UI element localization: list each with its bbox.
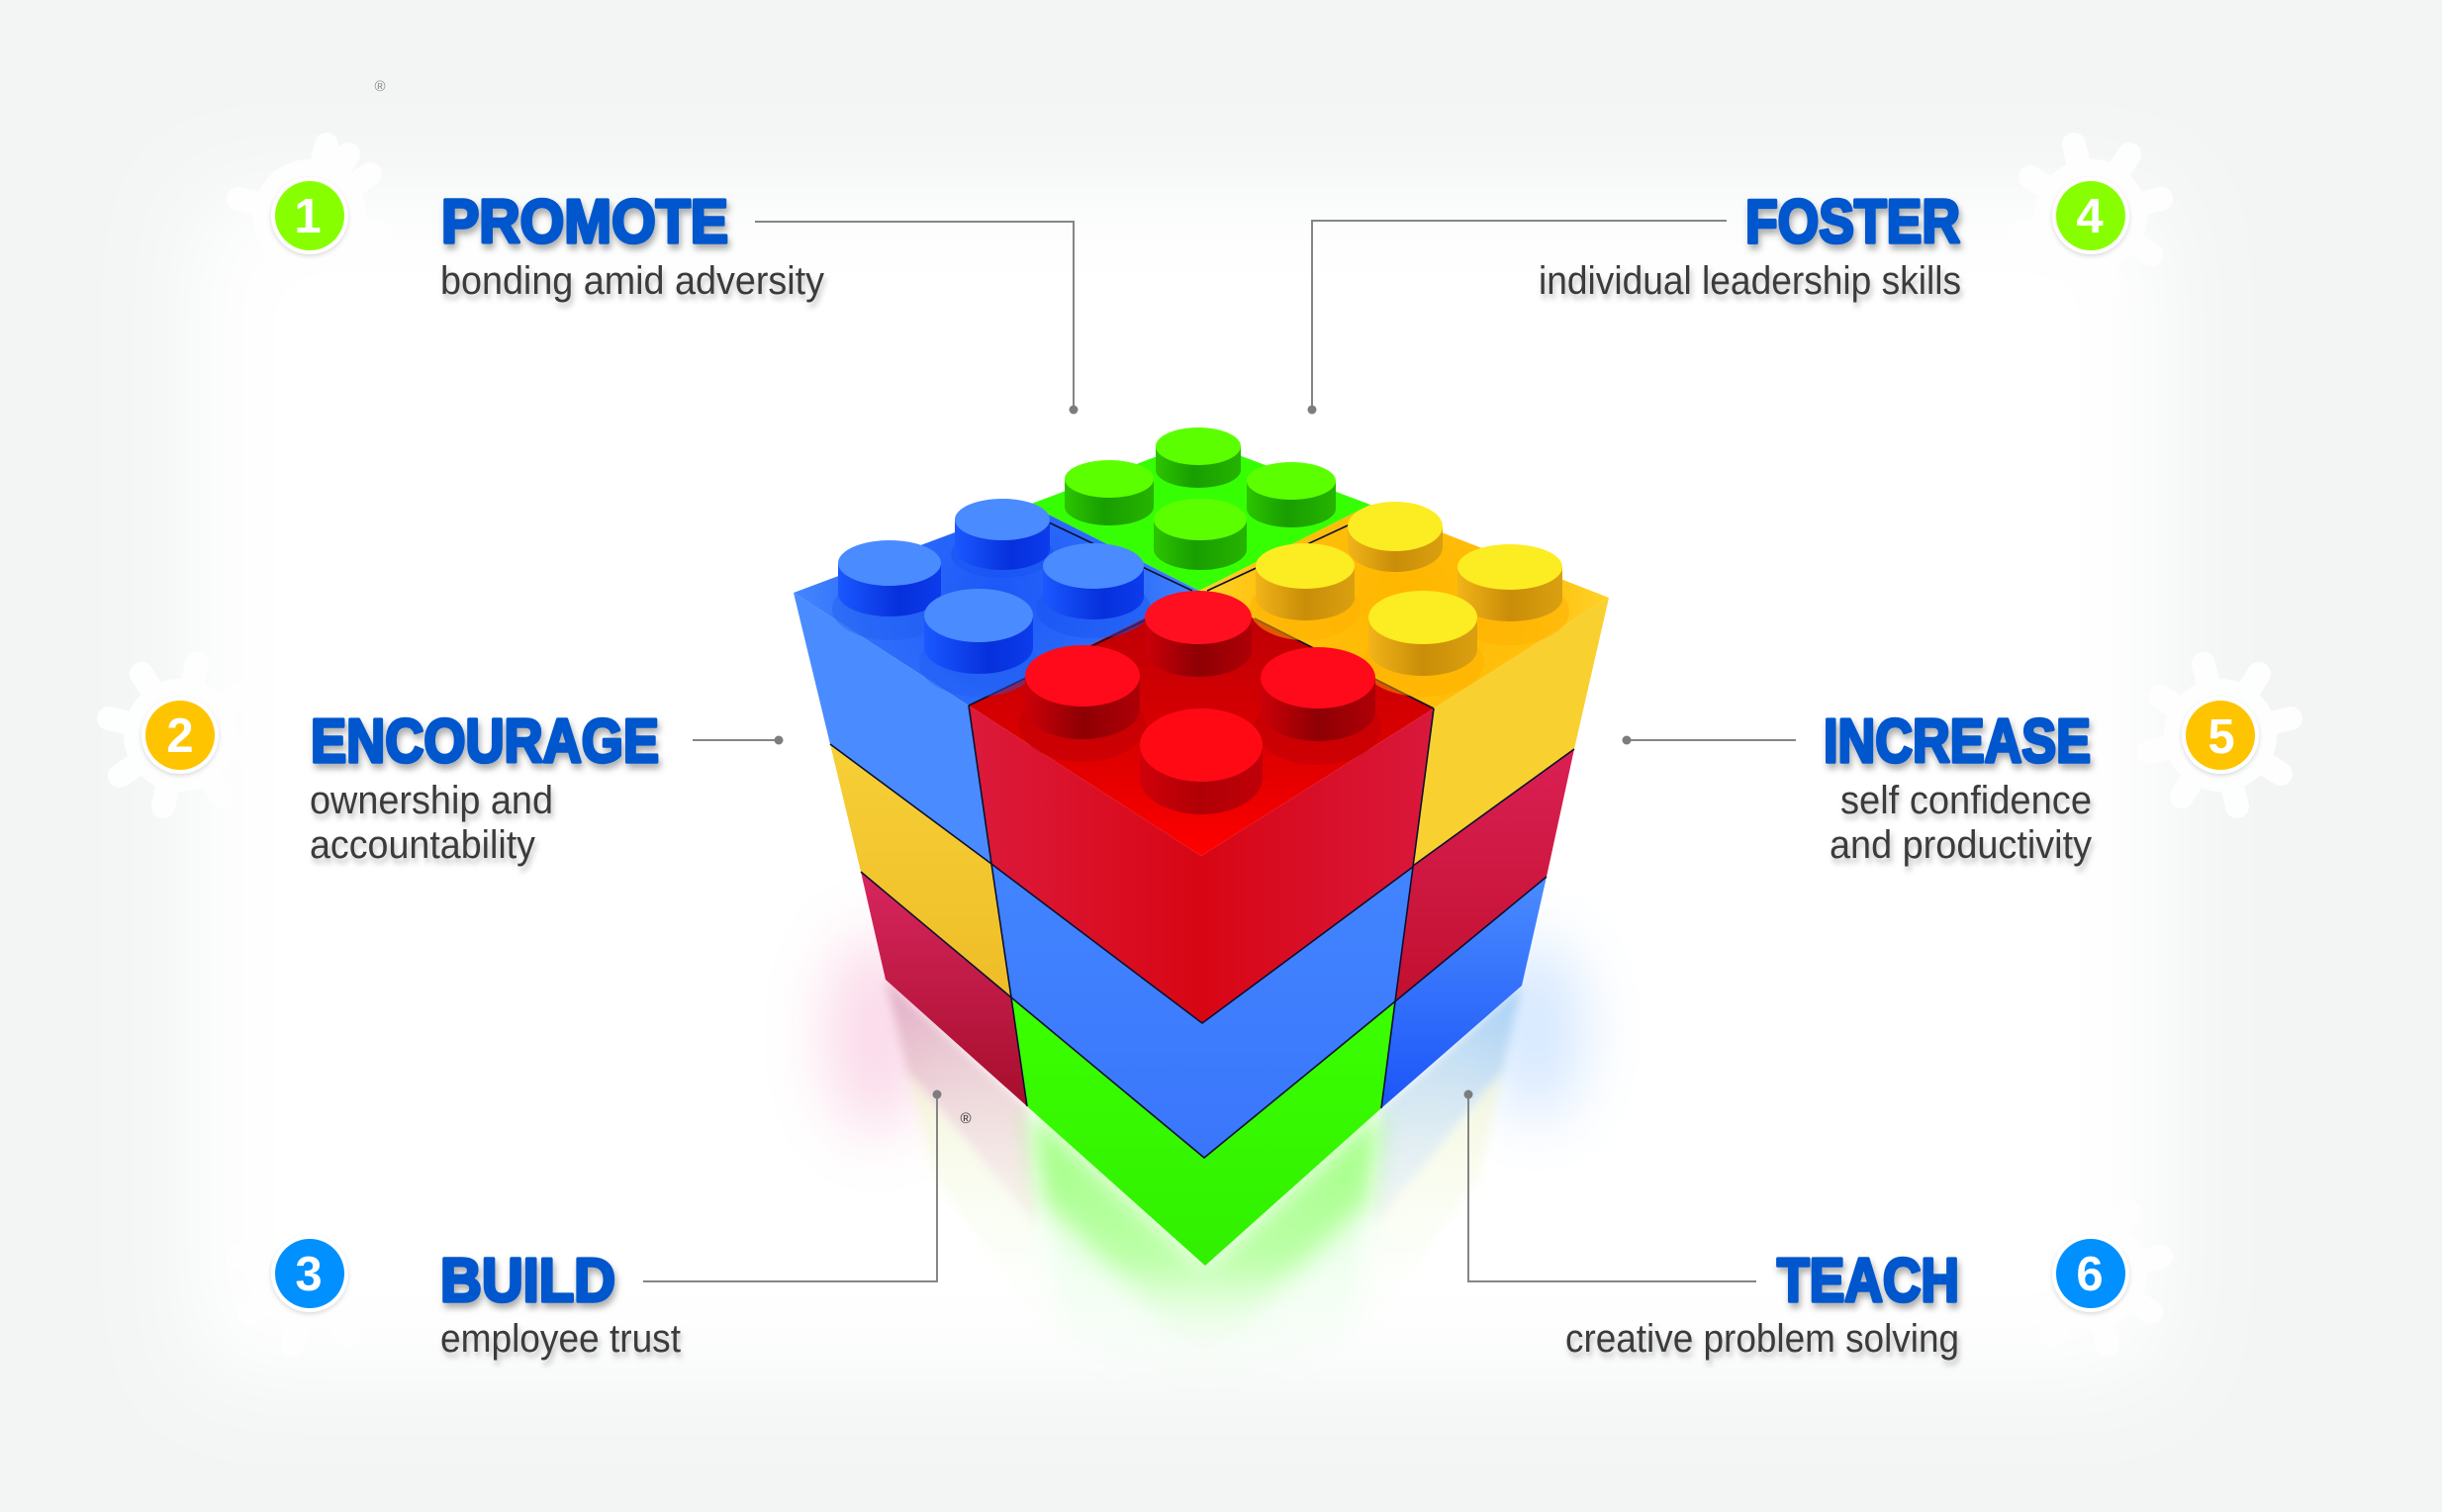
- leader line: promote: [755, 222, 1079, 414]
- top face: green: [1029, 440, 1370, 591]
- front: red chevron: [969, 706, 1434, 1023]
- yellow studs: [1250, 502, 1569, 697]
- badge 2: [141, 697, 219, 774]
- top face: blue: [794, 505, 1199, 706]
- red studs: [1019, 591, 1381, 814]
- badge 2: 2: [166, 709, 194, 763]
- badge 4: 4: [2076, 190, 2104, 243]
- leader line: foster: [1308, 221, 1727, 414]
- registered mark top: ®: [374, 78, 386, 95]
- text block: encourage: ENCOURAGE: [311, 708, 659, 776]
- text block: build: [440, 1247, 681, 1361]
- badge 5: [2182, 697, 2259, 774]
- left column: blue side: [794, 593, 991, 864]
- left column: crimson side: [861, 872, 1027, 1106]
- gear: badge 2: [109, 664, 251, 806]
- text block: promote: bonding amid adversity: [440, 259, 824, 303]
- badge 6: [2052, 1235, 2129, 1312]
- text block: increase: self confidence: [1840, 779, 2092, 822]
- leader line: increase: [1623, 736, 1796, 744]
- gear: badge 6: [2019, 1202, 2161, 1345]
- top face: red: [969, 591, 1434, 856]
- text block: promote: PROMOTE: [441, 188, 728, 256]
- text block: encourage: ownership and: [310, 779, 553, 822]
- text block: foster: [1539, 188, 1961, 303]
- text block: build: BUILD: [440, 1247, 615, 1315]
- text block: increase: [1824, 708, 2092, 867]
- left column: yellow side: [830, 744, 1011, 997]
- leader line: encourage: [693, 736, 784, 744]
- text block: promote: [440, 188, 824, 303]
- gear: badge 3: [238, 1202, 381, 1345]
- text block: encourage: [310, 708, 659, 867]
- block seams: [830, 520, 1574, 1158]
- text block: teach: TEACH: [1777, 1247, 1959, 1315]
- cube glow and floor reflection: [828, 935, 1581, 1410]
- badge 1: 1: [294, 190, 322, 243]
- top face: yellow: [1199, 505, 1609, 709]
- badge 1: [271, 177, 348, 254]
- green studs: [1065, 427, 1336, 570]
- text block: build: employee trust: [440, 1317, 681, 1361]
- right column: blue side: [1381, 877, 1547, 1108]
- text block: foster: individual leadership skills: [1539, 259, 1961, 303]
- text block: teach: creative problem solving: [1565, 1317, 1959, 1361]
- gear: badge 4: [2019, 144, 2161, 287]
- text block: teach: [1565, 1247, 1959, 1361]
- text block: increase: and productivity: [1830, 823, 2092, 867]
- front: green chevron: [1011, 997, 1395, 1266]
- blue studs: [832, 499, 1151, 697]
- cube: lego block tower: [794, 427, 1609, 1266]
- badge 6: 6: [2076, 1248, 2104, 1301]
- text block: increase: INCREASE: [1824, 708, 2091, 776]
- gear: badge 1: [238, 144, 381, 287]
- right column: yellow side: [1413, 598, 1609, 866]
- text block: encourage: accountability: [310, 823, 535, 867]
- registered mark cube: ®: [960, 1110, 972, 1127]
- badge 3: 3: [295, 1248, 323, 1301]
- badge 5: 5: [2207, 710, 2235, 764]
- leader line: build: [643, 1090, 942, 1281]
- badge 4: [2052, 177, 2129, 254]
- front: blue chevron: [991, 864, 1413, 1158]
- text block: foster: FOSTER: [1745, 188, 1960, 256]
- badge 3: [271, 1235, 348, 1312]
- leader line: teach: [1464, 1090, 1756, 1281]
- gear: badge 5: [2149, 664, 2291, 806]
- right column: crimson side: [1395, 749, 1574, 1001]
